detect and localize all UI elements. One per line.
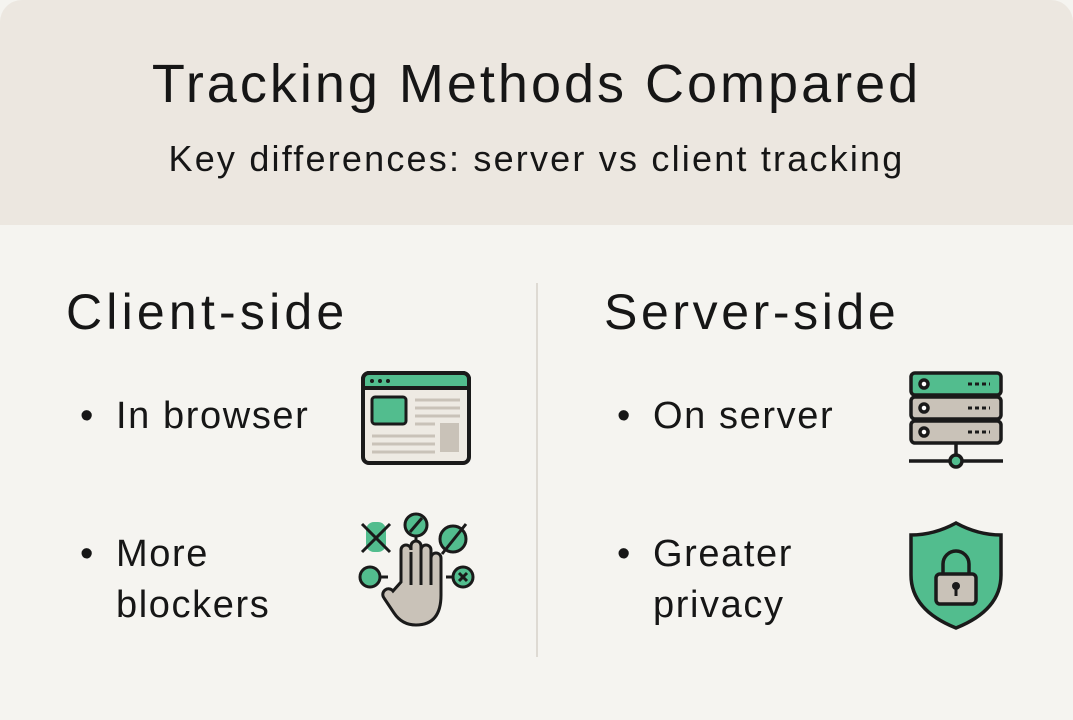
bullet: greater privacy: Greater (653, 533, 793, 575)
heading: server-side: Server-side (604, 284, 899, 340)
bullet: in browser: In browser (116, 395, 309, 437)
header band (0, 0, 1073, 225)
icon: server stack (909, 371, 1003, 469)
title: Tracking Methods Compared (152, 54, 921, 114)
bullet: more blockers (80, 533, 270, 626)
bullet: greater privacy: privacy (653, 584, 785, 626)
bullet: more blockers: More (116, 533, 209, 575)
icon: hand blocking (358, 512, 474, 626)
subtitle: Key differences: server vs client tracking (168, 138, 904, 179)
panel: server-side (604, 284, 899, 626)
panel: client-side (66, 284, 348, 626)
heading: client-side: Client-side (66, 284, 348, 340)
icon: browser window (361, 371, 471, 465)
divider (536, 283, 538, 657)
bullet: on server: On server (653, 395, 834, 437)
bullet: greater privacy: • (617, 533, 630, 575)
bullet: more blockers: blockers (116, 584, 270, 626)
bullet: more blockers: • (80, 533, 93, 575)
bullet: greater privacy (617, 533, 793, 626)
bullet: on server: • (617, 395, 630, 437)
icon: shield with lock (909, 521, 1003, 630)
bullet: in browser: • (80, 395, 93, 437)
